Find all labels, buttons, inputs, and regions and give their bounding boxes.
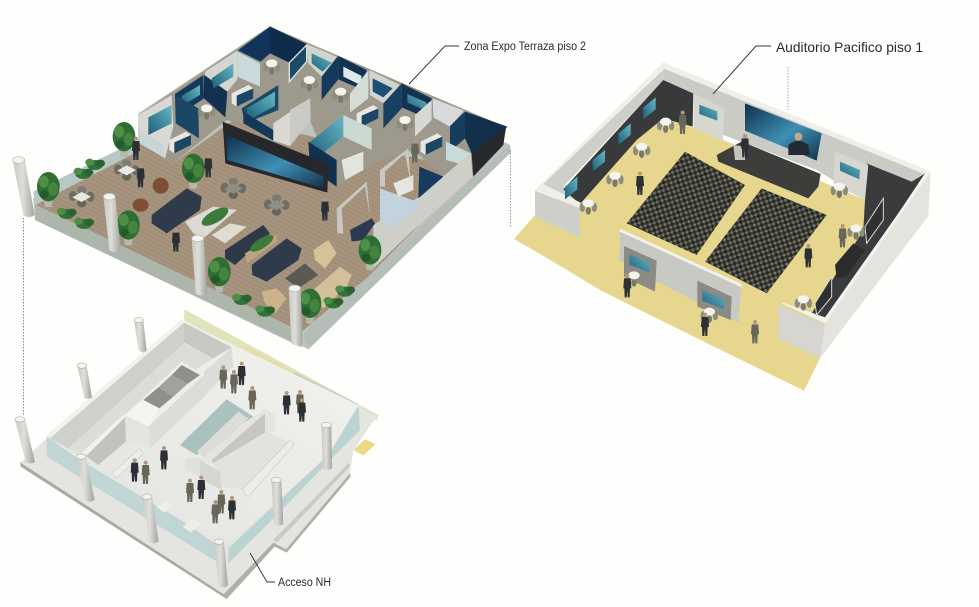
- front partition wall: [619, 229, 742, 323]
- partition screen left: [629, 254, 649, 273]
- white booth wall: [138, 95, 173, 158]
- door frame two: [380, 148, 411, 187]
- planter table: [185, 207, 237, 238]
- mid booth counter: [342, 152, 363, 180]
- pillars: [15, 317, 332, 587]
- front glass wall: [47, 437, 217, 562]
- back wall inner face: [50, 323, 184, 448]
- mid booth teal: [308, 115, 343, 158]
- corner dark wall: [472, 127, 506, 177]
- slab right edge: [223, 473, 351, 599]
- navy booth B right wall: [204, 75, 227, 117]
- partition side: [290, 98, 311, 146]
- navy sofa middle: [225, 225, 270, 265]
- island inner wall: [212, 413, 265, 463]
- top corner navy right wall: [270, 27, 307, 63]
- pillars: [13, 157, 303, 345]
- white booth D: [307, 44, 337, 77]
- top corner navy left wall: [238, 27, 270, 62]
- teal screen A: [148, 105, 172, 135]
- callout: Auditorio Pacifico piso 1: Auditorio Pacifico piso 1: [776, 39, 923, 55]
- right side dark block: [835, 243, 865, 278]
- shafts: [143, 387, 173, 408]
- back right panel: [833, 152, 868, 200]
- dark coffee table: [285, 263, 318, 288]
- central island inner: [197, 412, 248, 460]
- central island glass: [180, 399, 253, 455]
- dotted guide: auditorium: [787, 67, 789, 110]
- white booth I: [433, 98, 464, 127]
- cream armchair: [313, 240, 337, 268]
- audience block right: [705, 188, 827, 293]
- partition panel right: [697, 281, 732, 320]
- white door frames: [337, 182, 370, 233]
- counter E: [357, 105, 378, 127]
- callout: Acceso NH: Acceso NH: [278, 577, 331, 589]
- stage: [717, 142, 821, 198]
- corner navy back: [465, 112, 507, 153]
- right glass wall: [228, 406, 360, 563]
- white coffee tables: [212, 223, 247, 243]
- right terrace edge: [303, 145, 511, 349]
- stage screen: [745, 103, 822, 161]
- right white partitions: [373, 153, 473, 268]
- wall screen: [227, 135, 324, 188]
- callout: Auditorio Pacifico piso 1: [713, 39, 923, 94]
- callout: Acceso NH: [250, 553, 331, 589]
- plants: [37, 122, 381, 324]
- lower counter: [350, 218, 375, 242]
- blue screen B: [182, 85, 200, 106]
- right side dark panels: [865, 198, 883, 243]
- long room floor: [68, 343, 213, 453]
- planter middle: [245, 235, 277, 263]
- wooden deck floor: [36, 120, 473, 332]
- navy booth G left: [383, 83, 402, 128]
- podium: [733, 145, 745, 160]
- people: [623, 111, 847, 343]
- navy booth E left wall: [322, 56, 338, 100]
- yellow marker: [353, 439, 376, 455]
- right side dark panel low: [815, 277, 832, 315]
- counter G: [421, 133, 442, 155]
- back yellow-green strip: [184, 309, 378, 421]
- left room floor: [98, 442, 143, 477]
- mid booth map: [343, 115, 372, 150]
- partition panel left: [624, 246, 657, 292]
- partition screen right: [702, 290, 724, 309]
- navy screen F: [373, 78, 393, 97]
- right partition face: [204, 347, 233, 394]
- dotted guide: terrace right: [510, 150, 512, 227]
- front partition rim: [619, 229, 742, 287]
- people: [132, 137, 419, 252]
- mid booth navy: [308, 142, 337, 187]
- centre navy panel: [242, 85, 278, 123]
- shaft three: [172, 365, 200, 384]
- corner panel: [289, 45, 307, 82]
- teal screen C: [212, 63, 233, 88]
- back wall right face: [184, 323, 232, 358]
- back glass strip: [293, 372, 358, 407]
- dotted guide: left pillar: [22, 218, 24, 415]
- centre teal screen: [247, 92, 275, 120]
- brown armchairs: [153, 178, 169, 194]
- cocktail tables: [580, 118, 865, 323]
- entrance step line: [273, 463, 350, 543]
- front glass railing: [35, 205, 302, 347]
- cream armchair front: [262, 288, 287, 313]
- brown armchair two: [133, 198, 149, 212]
- corner navy left: [450, 112, 465, 152]
- panel: auditorio pacifico floor plan: [514, 62, 931, 391]
- right outer wall: [820, 171, 931, 358]
- graphic panel A: [141, 132, 163, 157]
- wall top rim: [535, 62, 931, 208]
- right wall rim: [782, 171, 931, 323]
- left glass railing: [33, 140, 139, 205]
- yellow carpet floor: [514, 113, 873, 391]
- solid block top: [125, 400, 159, 427]
- white booth F: [369, 70, 400, 103]
- booth band floor: [138, 27, 507, 187]
- left dark panels: [563, 80, 693, 204]
- slab front edge: [20, 462, 227, 599]
- right counter: [393, 175, 413, 197]
- navy sofa right: [252, 238, 302, 282]
- wall frame: [223, 122, 328, 193]
- left stub wall: [535, 191, 580, 237]
- panel: terraza expo floor plan: [13, 26, 511, 349]
- back wall rim: [47, 319, 184, 438]
- planter greens middle: [248, 232, 276, 255]
- left small room rim: [82, 414, 126, 456]
- island rim and back block: [200, 408, 275, 463]
- dining sets: [69, 59, 414, 216]
- planter greens: [199, 204, 231, 229]
- navy booth E back wall: [338, 56, 367, 92]
- right dark interior: [812, 163, 925, 318]
- island floor: [213, 432, 292, 490]
- callout: Zona Expo Terraza piso 2: [409, 41, 586, 84]
- block left face: [125, 415, 150, 448]
- white screen E: [343, 67, 362, 85]
- bench: [112, 448, 143, 478]
- light glass panel: [446, 142, 471, 167]
- navy booth B back wall: [175, 75, 204, 117]
- left room inner wall: [86, 417, 126, 465]
- right brochure panel: [380, 188, 417, 228]
- blue screen G: [407, 94, 427, 111]
- audience block left: [627, 152, 745, 255]
- right navy panel: [418, 167, 443, 198]
- callout: Zona Expo Terraza piso 2: Zona Expo Terraza piso 2: [464, 41, 586, 53]
- map wall E: [350, 70, 368, 113]
- block top: [125, 362, 204, 427]
- people group: [131, 362, 306, 523]
- interior floor: [47, 320, 358, 547]
- back left panel: [693, 93, 724, 142]
- wall screens left: [565, 97, 656, 199]
- large video wall: [223, 122, 328, 193]
- island front face left: [185, 457, 200, 477]
- teal screen D: [312, 53, 332, 72]
- counter A: [169, 132, 191, 153]
- cream sofa: [313, 267, 352, 308]
- panel: acceso NH lobby floor plan: [15, 309, 378, 599]
- navy booth G back: [402, 83, 432, 120]
- back wall: [663, 68, 925, 200]
- central white partition: [273, 98, 311, 146]
- base slab: [20, 333, 377, 595]
- map wall: [237, 52, 260, 87]
- navy sofa left: [152, 188, 202, 233]
- block front face: [148, 375, 206, 448]
- service blocks: [125, 362, 206, 448]
- island front face right: [200, 460, 222, 490]
- booth row: back right wall: [307, 44, 507, 177]
- back right panel screen: [840, 162, 860, 179]
- shaft two: [158, 375, 187, 397]
- island end bench: [243, 440, 295, 497]
- reception counters: [157, 501, 201, 533]
- front right stub wall: [778, 305, 825, 358]
- white booth C: [205, 51, 237, 92]
- speaker on screen: [788, 133, 810, 155]
- back left panel screen: [699, 105, 717, 121]
- counter B: [232, 85, 253, 107]
- centre navy panel lower: [243, 112, 273, 141]
- navy booth map panel: [176, 95, 199, 138]
- terrace slab: [33, 26, 511, 349]
- left wall interior: [543, 69, 663, 204]
- back yellow stripes: [245, 345, 293, 385]
- booth row: back left wall: [138, 27, 307, 158]
- white booth H: [415, 100, 432, 137]
